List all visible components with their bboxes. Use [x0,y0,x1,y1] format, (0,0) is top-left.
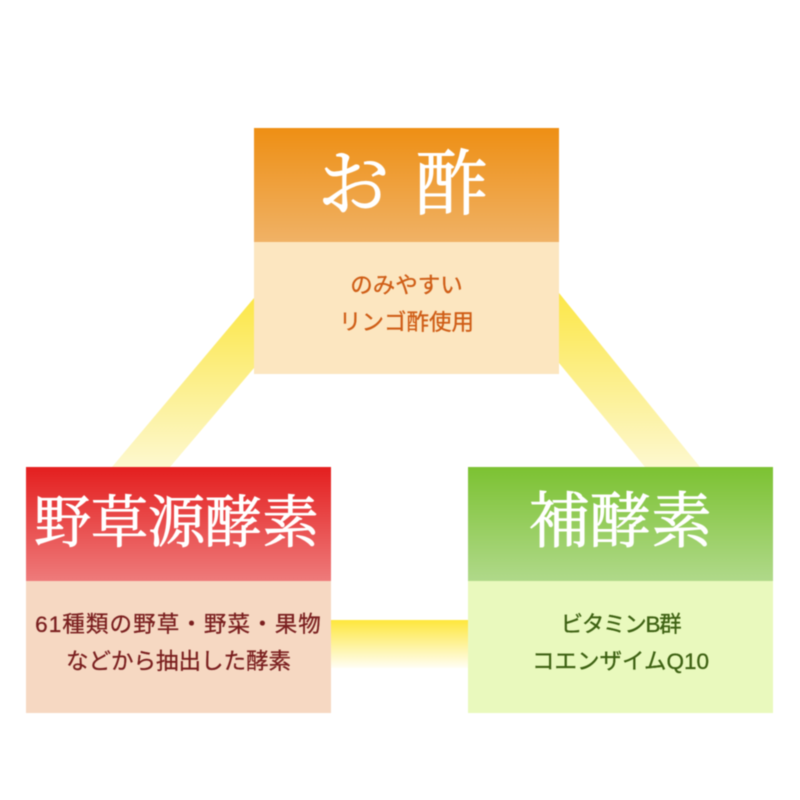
heading: 野草源酵素 [26,467,331,581]
text: 野草源酵素 description: 61種類の野草・野菜・果物 [35,612,322,637]
panel: 野草源酵素 [25,466,332,714]
text: 補酵素 description: ビタミンB群 [561,612,680,637]
heading: お酢 [254,128,559,242]
text: 補酵素 description: コエンザイムQ10 [532,649,709,674]
panel: お酢 [253,127,560,374]
heading: 補酵素: 補酵素 [529,489,712,556]
panel: 補酵素 [467,466,774,714]
heading: お酢: お 酢 [317,145,488,225]
text: 野草源酵素 description [26,581,331,713]
heading: 補酵素 [468,467,773,581]
text: 野草源酵素 description: などから抽出した酵素 [66,649,291,674]
text: お酢 description [254,242,559,374]
text: 補酵素 description [468,581,773,713]
heading: 野草源酵素: 野草源酵素 [34,492,319,555]
text: お酢 description: のみやすい [350,273,463,298]
text: お酢 description: リンゴ酢使用 [339,310,474,335]
